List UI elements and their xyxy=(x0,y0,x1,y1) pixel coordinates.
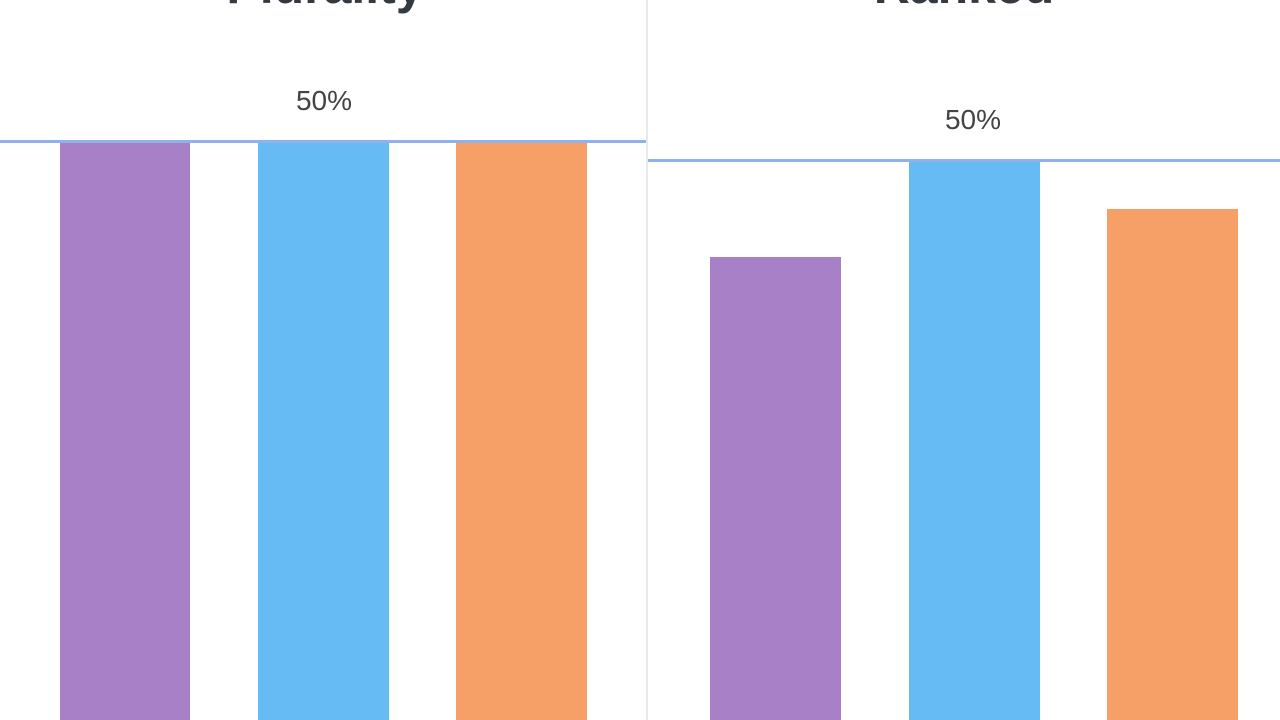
threshold line xyxy=(648,159,1280,162)
bar: purple xyxy=(710,257,841,720)
label: 50% threshold: 50% xyxy=(296,85,352,116)
bar: purple xyxy=(60,143,190,720)
panel: plurality xyxy=(0,0,646,720)
bar: blue xyxy=(258,143,389,720)
bar: orange xyxy=(1107,209,1238,720)
label: 50% threshold: 50% xyxy=(945,104,1001,135)
bar: blue xyxy=(909,162,1040,720)
panel: ranked xyxy=(648,0,1280,720)
bar: orange xyxy=(456,143,587,720)
threshold line xyxy=(0,140,646,143)
